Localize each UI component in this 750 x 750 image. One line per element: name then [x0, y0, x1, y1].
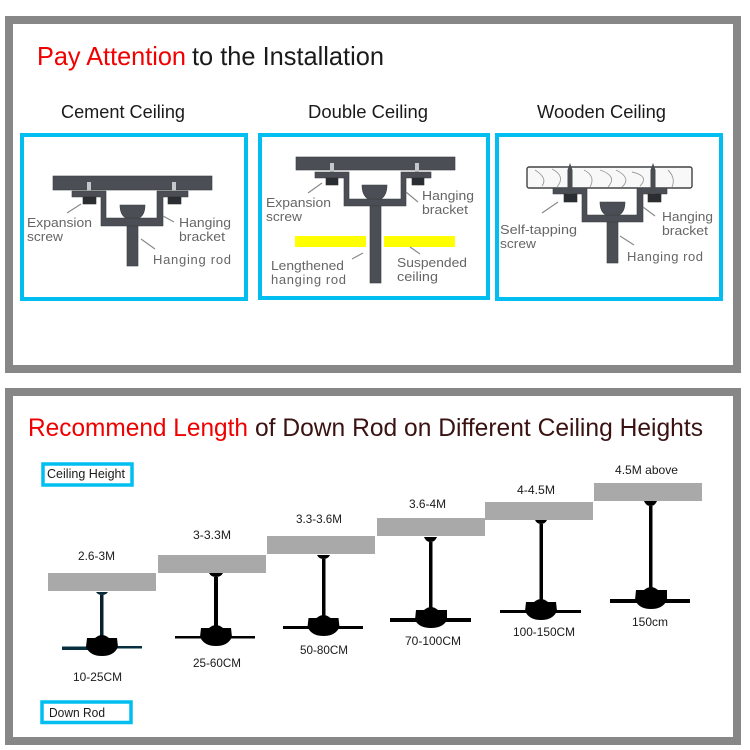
title: pay attention: to the Installation	[192, 41, 384, 71]
fan: 3-3.3M: 3-3.3M	[193, 528, 231, 542]
fan: 4.5M above	[594, 463, 702, 629]
diagram: cement ceiling	[22, 135, 246, 299]
legend: down rod: Down Rod	[49, 706, 105, 720]
diagram: cement ceiling: Hanging	[179, 215, 231, 230]
fan: 3.3-3.6M: 3.3-3.6M	[296, 512, 342, 526]
diagram: double ceiling: ceiling	[397, 269, 438, 284]
diagram: double ceiling: Lengthened	[271, 258, 344, 273]
diagram: wooden ceiling: screw	[500, 236, 537, 251]
diagram: cement ceiling: Hanging rod	[153, 252, 231, 267]
title: recommend length: Recommend Length	[28, 414, 248, 442]
fan: 3-3.3M	[158, 528, 266, 670]
panel: recommended rod length	[9, 392, 737, 741]
diagram: double ceiling: bracket	[422, 202, 468, 217]
fan: 2.6-3M: 2.6-3M	[78, 549, 115, 563]
fan: 3.3-3.6M: 50-80CM	[300, 643, 348, 657]
yellow suspended ceiling	[295, 236, 455, 247]
fan: 2.6-3M	[48, 549, 156, 684]
fan: 4-4.5M: 100-150CM	[513, 625, 575, 639]
diagram: wooden ceiling	[497, 135, 721, 299]
diagram: double ceiling: screw	[266, 209, 303, 224]
diagram: wooden ceiling: Hanging	[662, 209, 713, 224]
fan: 3-3.3M: 25-60CM	[193, 656, 241, 670]
diagram: double ceiling: Suspended	[397, 255, 467, 270]
heading: wooden ceiling: Wooden Ceiling	[537, 102, 666, 122]
legend: down rod	[42, 702, 131, 722]
diagram: cement ceiling: screw	[27, 229, 64, 244]
diagram: wooden ceiling: Hanging rod	[627, 249, 703, 264]
diagram: cement ceiling: bracket	[179, 229, 225, 244]
diagram: double ceiling: Expansion	[266, 195, 331, 210]
title: recommend length: of Down Rod on Different Ceiling Heights	[255, 414, 703, 442]
fan: 2.6-3M: 10-25CM	[73, 670, 122, 684]
fan: 3.3-3.6M	[267, 512, 375, 657]
diagram: wooden ceiling: bracket	[662, 223, 708, 238]
diagram: cement ceiling: Expansion	[27, 215, 92, 230]
fan: 4.5M above: 150cm	[632, 615, 668, 629]
diagram: double ceiling	[260, 135, 488, 298]
heading: double ceiling: Double Ceiling	[308, 102, 428, 122]
fan: 3.6-4M: 3.6-4M	[409, 497, 446, 511]
heading: cement ceiling: Cement Ceiling	[61, 102, 185, 122]
fan: 3.6-4M	[377, 497, 485, 648]
legend: ceiling height	[43, 464, 132, 485]
fan: 3.6-4M: 70-100CM	[405, 634, 461, 648]
fan: 4.5M above: 4.5M above	[615, 463, 678, 477]
diagram: wooden ceiling: Self-tapping	[500, 222, 577, 237]
panel: installation	[9, 20, 737, 369]
title: pay attention: Pay Attention	[37, 41, 186, 71]
diagram: double ceiling: Hanging	[422, 188, 474, 203]
fan: 4-4.5M: 4-4.5M	[517, 483, 555, 497]
diagram: double ceiling: hanging rod	[271, 272, 346, 287]
legend: ceiling height: Ceiling Height	[47, 467, 126, 481]
fan: 4-4.5M	[485, 483, 593, 639]
